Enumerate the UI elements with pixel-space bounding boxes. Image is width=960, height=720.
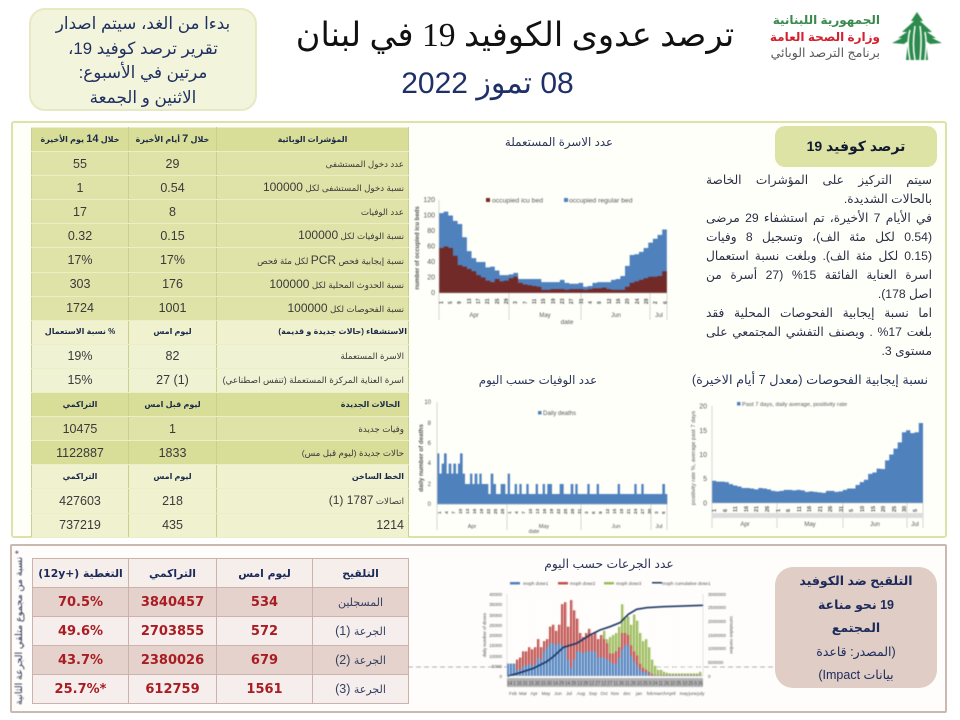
table: epidemiological indicators: 15%	[67, 373, 93, 387]
combo chart: daily doses: july	[697, 691, 705, 696]
area chart: positivity rate	[691, 402, 923, 528]
table: vaccination: التلقيح	[342, 566, 379, 580]
callout: publication schedule: تقرير ترصد كوفيد 19،	[68, 38, 218, 58]
combo chart: daily doses: 1000000	[708, 646, 726, 651]
combo chart: daily doses: 3000000	[708, 592, 726, 597]
bar chart: occupied beds: 4	[588, 301, 594, 304]
bar chart: occupied beds: occupied regular bed	[569, 198, 633, 204]
dashed connector	[408, 666, 775, 668]
combo chart: daily doses: march	[654, 691, 667, 696]
combo chart: daily doses: Jul	[566, 691, 572, 696]
table: epidemiological indicators	[31, 127, 409, 538]
area chart: positivity rate: 15	[871, 506, 877, 512]
bar chart: daily deaths: 10	[424, 400, 432, 406]
bar chart: daily deaths: 24	[633, 508, 639, 514]
combo chart: daily doses: moph dose2	[570, 581, 596, 586]
bar chart: daily deaths: 6	[591, 511, 597, 514]
area chart: positivity rate: 6	[786, 509, 792, 512]
text block: surveillance summary: (0.54 لكل مئة الف)، وتسجيل 8 وفيات	[706, 230, 932, 244]
table: epidemiological indicators: 0.32	[68, 229, 92, 243]
table: epidemiological indicators: 55	[73, 157, 87, 171]
table: epidemiological indicators: 427603	[59, 494, 101, 508]
bar chart: daily deaths	[418, 400, 667, 535]
heading box: vaccination towards community immunity: 19 نحو مناعة	[818, 598, 894, 612]
table: vaccination: المسجلين	[338, 596, 383, 608]
bar chart: occupied beds: 31	[579, 298, 585, 304]
table: epidemiological indicators: ليوم امس	[153, 472, 192, 481]
bar chart: occupied beds: Jul	[655, 313, 663, 319]
combo chart: daily doses: may	[680, 691, 689, 696]
area chart: positivity rate: positivity rate %, average past 7 days	[691, 411, 697, 505]
bar chart: daily deaths: 22	[486, 508, 492, 514]
combo chart: daily doses: May	[542, 691, 551, 696]
table: epidemiological indicators: نسبة الحدوث المحلية لكل 100000	[269, 277, 404, 291]
area chart: positivity rate: Past 7 days, daily average, positivity rate	[742, 402, 847, 408]
bar chart: daily deaths: Apr	[468, 524, 476, 530]
combo chart: daily doses: 40000	[489, 592, 502, 597]
bar chart: occupied beds: 3	[513, 301, 519, 304]
combo chart: daily doses: daily number of doses	[482, 612, 487, 657]
area chart: positivity rate: 30	[902, 506, 908, 512]
bar chart: daily deaths: 22	[556, 508, 562, 514]
combo chart: daily doses: Mar	[519, 691, 527, 696]
table: epidemiological indicators: عدد دخول المستشفى	[326, 159, 404, 169]
chart title: positivity rate: نسبة إيجابية الفحوصات (معدل 7 أيام الاخيرة)	[692, 372, 928, 387]
area chart: positivity rate: 26	[765, 506, 771, 512]
combo chart: daily doses: moph cumulative dose1	[662, 581, 711, 586]
bar chart: occupied beds: 40	[427, 259, 435, 266]
bar chart: occupied beds: 60	[427, 244, 435, 250]
combo chart: daily doses	[482, 581, 734, 696]
combo chart: daily doses: Apr	[530, 691, 538, 696]
table: vaccination: 43.7%	[58, 652, 103, 668]
table: epidemiological indicators: التراكمي	[63, 400, 97, 409]
bar chart: daily deaths: Daily deaths	[543, 411, 576, 417]
bar chart: occupied beds: Jun	[611, 313, 621, 319]
bar chart: daily deaths: 7	[451, 511, 457, 514]
bar chart: daily deaths: May	[539, 524, 549, 530]
table: epidemiological indicators: اسرة العناية المركزة المستعملة (تنفس اصطناعي)	[223, 375, 404, 385]
area chart: positivity rate: Jul	[911, 522, 919, 528]
text block: surveillance summary: (0.15 لكل مئة الف). وبلغت نسبة استعمال	[706, 249, 932, 263]
combo chart: daily doses: 20000	[489, 633, 502, 638]
bar chart: daily deaths: 27	[640, 508, 646, 514]
bar chart: daily deaths: 18	[619, 508, 625, 514]
table: epidemiological indicators: 10475	[63, 422, 97, 436]
area chart: positivity rate: 25	[892, 506, 898, 512]
bar chart: daily deaths: 25	[563, 508, 569, 514]
combo chart: daily doses: 30000	[489, 613, 502, 618]
area chart: positivity rate: 0	[703, 500, 707, 508]
table: vaccination: الجرعة (3)	[335, 682, 386, 696]
bar chart: daily deaths: 1	[437, 511, 443, 514]
combo chart: daily doses: 15000	[489, 643, 502, 648]
bar chart: occupied beds: 23	[560, 298, 566, 304]
table: epidemiological indicators: اتصالات 1787 (1)	[329, 493, 404, 507]
table: vaccination: التراكمي	[149, 566, 196, 580]
table: epidemiological indicators: ليوم قبل امس	[144, 400, 201, 409]
bar chart: daily deaths: 28	[500, 508, 506, 514]
heading box: COVID-19 surveillance: ترصد كوفيد 19	[807, 138, 905, 154]
area chart: positivity rate: 6	[723, 509, 729, 512]
table: epidemiological indicators: وفيات جديدة	[358, 424, 404, 434]
area chart: positivity rate: 11	[733, 506, 739, 512]
table: epidemiological indicators: 17%	[160, 253, 185, 267]
area chart: positivity rate: 5	[703, 476, 707, 483]
area chart: positivity rate: 16	[807, 506, 813, 512]
bar chart: occupied beds: 24	[635, 298, 641, 304]
combo chart: daily doses: Nov	[611, 691, 620, 696]
bar chart: daily deaths: 10	[528, 508, 534, 514]
bar chart: daily deaths: 21	[626, 508, 632, 514]
bar chart: daily deaths: 12	[605, 508, 611, 514]
bar chart: occupied beds: 29	[504, 298, 510, 304]
callout: publication schedule: بدءا من الغد، سيتم اصدار	[56, 14, 230, 33]
bar chart: occupied beds: date	[561, 319, 574, 326]
table: epidemiological indicators: 435	[162, 518, 183, 532]
bar chart: daily deaths: date	[529, 529, 539, 535]
bar chart: daily deaths: 1	[507, 511, 513, 514]
combo chart: daily doses: 25000	[489, 623, 502, 628]
combo chart: daily doses: Oct	[600, 691, 608, 696]
table: epidemiological indicators: 1833	[159, 446, 186, 460]
table: vaccination: 49.6%	[58, 624, 103, 638]
text block: surveillance summary: سيتم التركيز على المؤشرات الخاصة	[706, 173, 932, 187]
table: vaccination: 1561	[246, 682, 283, 696]
bar chart: daily deaths: 30	[647, 508, 653, 514]
combo chart: daily doses: moph dose1	[523, 581, 549, 586]
bar chart: occupied beds: May	[539, 313, 551, 319]
bar chart: daily deaths: 10	[458, 508, 464, 514]
area chart: positivity rate: 21	[818, 506, 824, 512]
combo chart: daily doses: feb	[647, 691, 654, 696]
combo chart: daily doses: April	[666, 691, 676, 696]
area chart: positivity rate: Jun	[870, 522, 880, 528]
bar chart: daily deaths: daily number of deaths	[418, 424, 425, 492]
table: epidemiological indicators: 737219	[59, 518, 101, 532]
callout: publication schedule: مرتين في الأسبوع:	[79, 63, 207, 82]
combo chart: daily doses: Sep	[589, 691, 598, 696]
bar chart: occupied beds: 28	[644, 298, 650, 304]
bar chart: daily deaths: 13	[465, 508, 471, 514]
bar chart: occupied beds: 80	[427, 228, 435, 235]
area chart: positivity rate: May	[804, 522, 816, 528]
bar chart: daily deaths: 4	[428, 461, 432, 467]
table: epidemiological indicators: ليوم امس	[153, 327, 192, 336]
chart title: occupied beds: عدد الاسرة المستعملة	[505, 135, 613, 149]
bar chart: daily deaths: 0	[428, 502, 432, 508]
area chart: positivity rate: Apr	[740, 522, 750, 528]
bar chart: daily deaths: 16	[542, 508, 548, 514]
bar chart: daily deaths: 15	[612, 508, 618, 514]
table: vaccination: 2703855	[141, 624, 204, 638]
table: vaccination: 572	[251, 624, 278, 638]
bar chart: daily deaths: 28	[570, 508, 576, 514]
bar chart: daily deaths: 3	[654, 511, 660, 514]
note: vertical footnote: * نسبة من مجموع متلقي الجرعة الثانية	[14, 550, 25, 705]
bar chart: occupied beds: 120	[423, 197, 435, 204]
area chart: positivity rate: 1	[776, 509, 782, 512]
table: epidemiological indicators: 8	[169, 205, 176, 219]
title: ترصد عدوى الكوفيد 19 في لبنان	[296, 17, 734, 54]
chart title: daily doses: عدد الجرعات حسب اليوم	[544, 557, 674, 571]
bar chart: occupied beds: 100	[423, 212, 435, 220]
table: epidemiological indicators: 1122887	[56, 446, 104, 460]
combo chart: daily doses: 0	[708, 674, 711, 679]
area chart: positivity rate: 5	[849, 509, 855, 512]
text block: surveillance summary: بلغت 17% . ويصنف التفشي المجتمعي على	[706, 325, 932, 339]
table: epidemiological indicators: الاسرة المستعملة	[340, 351, 404, 361]
logo text: Ministry of Public Health	[770, 13, 880, 60]
heading box: COVID-19 surveillance	[775, 126, 937, 167]
heading box: vaccination towards community immunity: المجتمع	[832, 621, 880, 635]
table: epidemiological indicators: 1724	[66, 301, 94, 315]
heading box: vaccination towards community immunity	[775, 567, 937, 688]
table: epidemiological indicators: 0.15	[160, 229, 185, 243]
combo chart: daily doses: 0	[499, 674, 502, 679]
bar chart: occupied beds: 2	[653, 301, 659, 304]
icon: cedar logo	[892, 12, 942, 60]
logo text: Ministry of Public Health: الجمهورية اللبنانية	[773, 13, 880, 27]
bar chart: occupied beds: 16	[616, 298, 622, 304]
bar chart: occupied beds: 8	[597, 301, 603, 304]
callout: publication schedule	[29, 8, 257, 111]
text block: surveillance summary: مستوى 3.	[882, 344, 932, 358]
bar chart: occupied beds: 25	[495, 298, 501, 304]
bar chart: daily deaths: 6	[428, 441, 432, 447]
combo chart: daily doses: Feb	[509, 691, 517, 696]
bar chart: daily deaths: 6	[661, 511, 667, 514]
table: epidemiological indicators: 29	[166, 157, 179, 171]
combo chart: daily doses: 14 1 16 31 15 30 15 30 14 29 14 29 13 28 12 27 12 27 11 26 11 26 10 25 9 24 11 26 10 25 10 25 9 26	[507, 681, 703, 687]
area chart: positivity rate: 10	[699, 452, 707, 459]
table: epidemiological indicators: نسبة دخول المستشفى لكل 100000	[263, 180, 404, 194]
table: epidemiological indicators: نسبة الوفيات لكل 100000	[298, 228, 404, 242]
table: epidemiological indicators: 218	[162, 494, 183, 508]
bar chart: occupied beds: 17	[476, 298, 482, 304]
area chart: positivity rate: 31	[839, 506, 845, 512]
table: vaccination: 3840457	[141, 594, 204, 610]
combo chart: daily doses: 2500000	[708, 605, 726, 610]
combo chart: daily doses: cumulative number	[729, 616, 734, 655]
table: epidemiological indicators: الحالات الجديدة	[341, 400, 400, 409]
table: vaccination: 2380026	[141, 652, 204, 668]
bar chart: occupied beds: 5	[448, 301, 454, 304]
bar chart: occupied beds: 9	[457, 301, 463, 304]
table: epidemiological indicators: 303	[70, 277, 90, 291]
text block: surveillance summary: اصل 178).	[878, 287, 932, 301]
heading box: vaccination towards community immunity: (المصدر: قاعدة	[816, 644, 896, 658]
bar chart: daily deaths: 8	[428, 421, 432, 427]
table: epidemiological indicators: نسبة إيجابية فحص PCR لكل مئة فحص	[257, 253, 404, 267]
table: vaccination: ليوم امس	[238, 566, 291, 580]
heading box: vaccination towards community immunity: بيانات Impact)	[818, 668, 894, 682]
area chart: positivity rate: 26	[828, 506, 834, 512]
bar chart: daily deaths: 3	[584, 511, 590, 514]
table: vaccination: 534	[251, 594, 278, 610]
combo chart: daily doses: 35000	[489, 602, 502, 607]
bar chart: occupied beds: 0	[431, 290, 435, 297]
area chart: positivity rate: 1	[712, 509, 718, 512]
bar chart: occupied beds: number of occupied icu beds	[415, 206, 421, 290]
bar chart: daily deaths: Jul	[655, 524, 663, 530]
combo chart: daily doses: 5000	[492, 664, 502, 669]
table: epidemiological indicators: التراكمي	[63, 472, 97, 481]
table: epidemiological indicators: 17	[73, 205, 87, 219]
table: epidemiological indicators: المؤشرات الوبائية	[278, 135, 347, 144]
chart title: daily deaths: عدد الوفيات حسب اليوم	[479, 373, 597, 387]
text block: surveillance summary: في الأيام 7 الأخيرة، تم استشفاء 29 مرضى	[706, 211, 932, 225]
bar chart: occupied beds: 19	[551, 298, 557, 304]
table: vaccination: 612759	[145, 682, 200, 696]
bar chart: occupied beds	[415, 197, 669, 326]
table: epidemiological indicators: 19%	[67, 349, 93, 363]
table: epidemiological indicators: الاستشفاء (حالات جديدة و قديمة)	[278, 327, 407, 336]
table: epidemiological indicators: 27 (1)	[156, 373, 189, 387]
bar chart: occupied beds: 13	[467, 298, 473, 304]
bar chart: daily deaths: 19	[479, 508, 485, 514]
bar chart: occupied beds: 21	[485, 298, 491, 304]
bar chart: daily deaths: 31	[577, 508, 583, 514]
date subtitle: 08 تموز 2022	[401, 67, 574, 100]
combo chart: daily doses: 1500000	[708, 633, 726, 638]
combo chart: daily doses: Aug	[577, 691, 586, 696]
area chart: positivity rate: 16	[744, 506, 750, 512]
combo chart: daily doses: Jun	[554, 691, 562, 696]
table: epidemiological indicators: % نسبة الاستعمال	[45, 327, 115, 336]
heading box: vaccination towards community immunity: التلقيح ضد الكوفيد	[799, 574, 913, 588]
table: epidemiological indicators: 1001	[159, 301, 186, 315]
bar chart: occupied beds: 11	[532, 298, 538, 304]
combo chart: daily doses: 2000000	[708, 619, 726, 624]
combo chart: daily doses: jan	[635, 691, 643, 696]
table: epidemiological indicators: الخط الساخن	[352, 472, 404, 481]
table: epidemiological indicators: 82	[166, 349, 179, 363]
area chart: positivity rate: 20	[881, 506, 887, 512]
table: epidemiological indicators: 1214	[376, 518, 404, 532]
area chart: positivity rate: 21	[754, 506, 760, 512]
table: epidemiological indicators: 1	[169, 422, 176, 436]
panel: vaccination	[10, 544, 947, 713]
combo chart: daily doses: dec	[623, 691, 631, 696]
combo chart: daily doses: moph dose3	[616, 581, 642, 586]
bar chart: occupied beds: 1	[439, 301, 445, 304]
table: vaccination: 25.7%*	[55, 682, 106, 696]
table: vaccination: الجرعة (1)	[335, 624, 386, 638]
table: epidemiological indicators: 17%	[67, 253, 93, 267]
bar chart: occupied beds: occupied icu bed	[492, 198, 543, 204]
table: epidemiological indicators: عدد الوفيات	[361, 207, 404, 217]
bar chart: daily deaths: 4	[514, 511, 520, 514]
area chart: positivity rate: 20	[699, 404, 707, 410]
bar chart: daily deaths: 13	[535, 508, 541, 514]
combo chart: daily doses: 500000	[708, 660, 724, 665]
bar chart: occupied beds: 6	[663, 301, 669, 304]
text block: surveillance summary: اما نسبة إيجابية الفحوصات المحلية فقد	[706, 306, 932, 320]
bar chart: daily deaths: Jun	[612, 524, 620, 530]
panel: epidemiological surveillance	[11, 121, 947, 538]
area chart: positivity rate: 11	[797, 506, 803, 512]
bar chart: daily deaths: 7	[521, 511, 527, 514]
table: epidemiological indicators: 0.54	[160, 181, 185, 195]
table: vaccination	[32, 558, 409, 704]
text block: surveillance summary: اسرة العناية الفائقة 15% (27 أسرة من	[706, 268, 932, 282]
bar chart: occupied beds: 27	[569, 298, 575, 304]
bar chart: daily deaths: 9	[598, 511, 604, 514]
combo chart: daily doses: 10000	[489, 654, 502, 659]
table: epidemiological indicators: 176	[162, 277, 183, 291]
area chart: positivity rate: 10	[860, 506, 866, 512]
table: vaccination: الجرعة (2)	[335, 653, 386, 667]
table: vaccination: 679	[251, 652, 278, 668]
table: epidemiological indicators: 1	[77, 181, 83, 195]
bar chart: daily deaths: 19	[549, 508, 555, 514]
text block: surveillance summary	[706, 173, 932, 358]
bar chart: daily deaths: 4	[444, 511, 450, 514]
bar chart: daily deaths: 25	[493, 508, 499, 514]
bar chart: occupied beds: 20	[625, 298, 631, 304]
table: vaccination: التغطية (12y+)	[38, 566, 123, 580]
table: epidemiological indicators: حالات جديدة (ليوم قبل مس)	[302, 448, 404, 458]
bar chart: occupied beds: 20	[427, 274, 435, 282]
table: epidemiological indicators: نسبة الفحوصات لكل 100000	[287, 301, 404, 315]
combo chart: daily doses: june	[688, 691, 698, 696]
table: vaccination: 70.5%	[58, 594, 103, 610]
text block: surveillance summary: بالحالات الشديدة.	[844, 192, 932, 206]
table: epidemiological indicators: خلال 14 يوم الأخيرة	[40, 133, 120, 145]
area chart: positivity rate: 15	[699, 428, 707, 435]
table: epidemiological indicators: خلال 7 أيام الأخيرة	[136, 133, 209, 145]
logo text: Ministry of Public Health: وزارة الصحة العامة	[770, 30, 880, 44]
bar chart: occupied beds: 12	[607, 298, 613, 304]
area chart: positivity rate: 5	[913, 509, 919, 512]
bar chart: occupied beds: 7	[523, 301, 529, 304]
bar chart: daily deaths: 16	[472, 508, 478, 514]
logo text: Ministry of Public Health: برنامج الترصد الوبائي	[771, 46, 880, 60]
bar chart: occupied beds: 15	[541, 298, 547, 304]
bar chart: daily deaths: 2	[428, 482, 432, 488]
callout: publication schedule: الاثنين و الجمعة	[90, 88, 196, 106]
bar chart: occupied beds: Apr	[469, 313, 479, 319]
